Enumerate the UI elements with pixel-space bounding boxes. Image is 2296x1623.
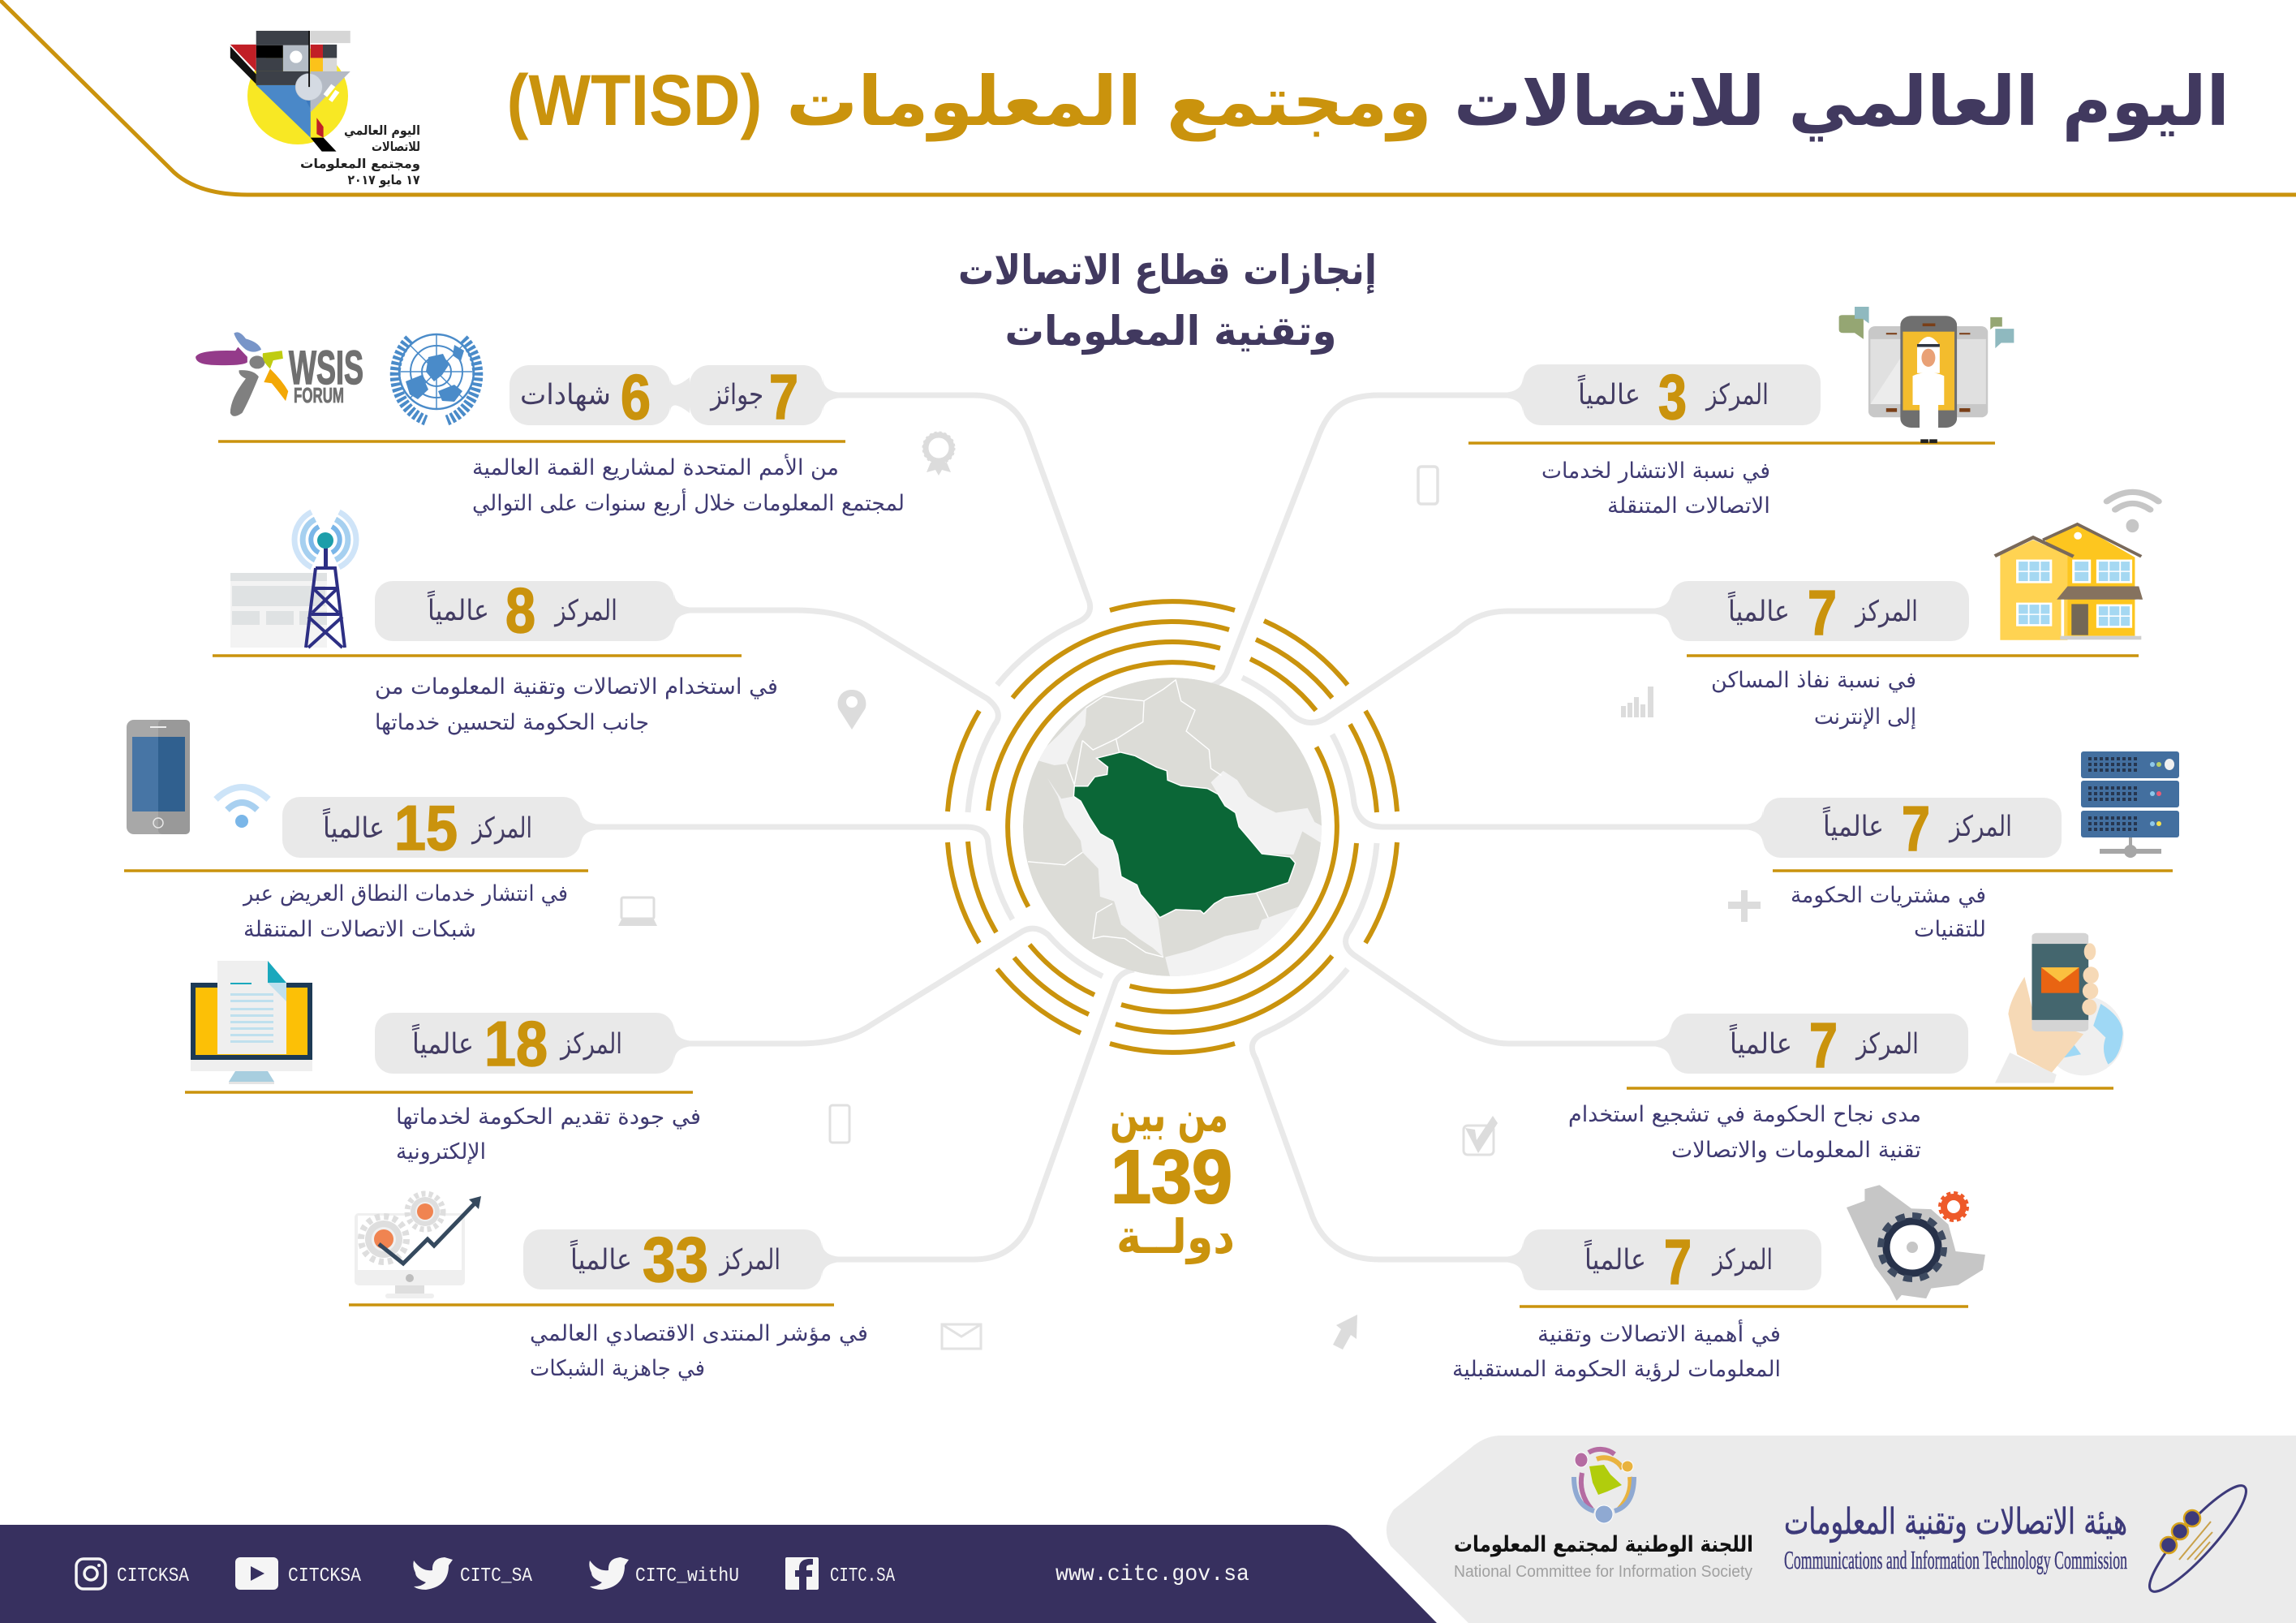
icon: WSIS Forum logo — [196, 332, 363, 416]
icon: WSIS Forum logo: WSIS — [289, 342, 363, 394]
title: ومجتمع المعلومات — [786, 62, 1432, 142]
event logo: ومجتمع المعلومات — [300, 156, 420, 171]
panel: rank 18 e-gov services — [185, 1008, 701, 1165]
footer logos panel — [1387, 1436, 2296, 1623]
panel: rank 3 mobile penetration: الاتصالات المتنقلة — [1607, 493, 1770, 519]
center label: 139 — [1111, 1134, 1232, 1219]
panel: rank 15 mobile broadband: المركز — [471, 812, 532, 845]
panel: rank 7 future vision: المعلومات لرؤية الحكومة المستقبلية — [1452, 1357, 1781, 1382]
icon: facebook — [785, 1557, 819, 1590]
icon: hand holding phone — [1995, 933, 2124, 1083]
panel: rank 7 household internet: 7 — [1808, 577, 1837, 648]
center label: من بين — [1110, 1087, 1228, 1143]
panel: rank 15 mobile broadband: في انتشار خدمات النطاق العريض عبر — [242, 881, 568, 906]
icon: arrow — [1333, 1315, 1357, 1350]
footer band — [0, 1525, 1437, 1623]
panel: rank 7 government success: 7 — [1809, 1010, 1838, 1081]
panel: rank 7 household internet — [1650, 577, 2139, 730]
panel: rank 8 government ICT use: المركز — [553, 595, 617, 627]
connectors — [581, 395, 1763, 1259]
panel: rank 7 household internet: في نسبة نفاذ المساكن — [1711, 668, 1916, 693]
panel: rank 18 e-gov services: الإلكترونية — [396, 1139, 486, 1165]
event logo: اليوم العالمي — [344, 123, 420, 139]
panel: rank 7 government procurement: للتقنيات — [1914, 917, 1986, 942]
icon: Saudi map with gears — [1847, 1185, 1985, 1301]
icon: twitter — [413, 1557, 453, 1590]
panel: rank 33 WEF network readiness: في جاهزية الشبكات — [530, 1356, 705, 1381]
panel: rank 7 government procurement: المركز — [1948, 811, 2012, 843]
icon: instagram — [76, 1559, 105, 1589]
Saudi Arabia — [1073, 752, 1296, 918]
icon: envelope — [942, 1324, 981, 1349]
subtitle: إنجازات قطاع الاتصالات — [958, 247, 1377, 295]
event logo: ١٧ مايو ٢٠١٧ — [347, 172, 420, 187]
icon: man on phones — [1839, 307, 2014, 443]
panel: awards and certificates: جوائز — [709, 379, 763, 411]
footer band: CITC_withU — [635, 1565, 739, 1587]
logo: national committee: National Committee for Information Society — [1454, 1563, 1752, 1581]
panel: rank 7 government procurement: في مشتريات الحكومة — [1791, 883, 1986, 908]
icon: mobile outline small — [830, 1105, 849, 1143]
footer band: CITCKSA — [117, 1565, 190, 1587]
panel: rank 8 government ICT use: عالمياً — [427, 590, 489, 627]
panel: rank 15 mobile broadband: شبكات الاتصالات المتنقلة — [243, 917, 476, 942]
footer band: www.citc.gov.sa — [1056, 1562, 1249, 1587]
panel: rank 7 future vision: في أهمية الاتصالات وتقنية — [1537, 1319, 1781, 1347]
panel: rank 3 mobile penetration: المركز — [1705, 379, 1769, 411]
panel: rank 8 government ICT use: في استخدام الاتصالات وتقنية المعلومات من — [375, 674, 778, 700]
panel: rank 7 household internet: إلى الإنترنت — [1814, 704, 1916, 730]
panel: rank 18 e-gov services: عالمياً — [411, 1023, 474, 1061]
panel: rank 3 mobile penetration: في نسبة الانتشار لخدمات — [1541, 458, 1770, 484]
gold rings — [948, 601, 1397, 1053]
panel: rank 8 government ICT use: 8 — [505, 575, 535, 646]
panel: rank 33 WEF network readiness: عالمياً — [570, 1239, 632, 1276]
footer band: CITC.SA — [830, 1565, 895, 1587]
panel: rank 7 government success — [1568, 1010, 2113, 1163]
panel: awards and certificates: شهادات — [520, 379, 611, 411]
icon: plus — [1728, 890, 1761, 922]
panel: rank 7 government success: تقنية المعلومات والاتصالات — [1671, 1138, 1921, 1163]
panel: rank 3 mobile penetration: 3 — [1658, 361, 1687, 433]
event logo — [230, 31, 420, 187]
panel: rank 3 mobile penetration — [1468, 361, 1995, 519]
title: اليوم العالمي للاتصالات — [1454, 62, 2229, 142]
wifi — [2107, 492, 2159, 510]
icon: house with wifi — [1995, 492, 2159, 640]
panel: rank 7 government procurement — [1743, 793, 2173, 942]
panel: awards and certificates — [218, 361, 905, 516]
panel: rank 7 household internet: المركز — [1854, 596, 1918, 628]
panel: awards and certificates: 6 — [621, 361, 651, 433]
panel: rank 3 mobile penetration: عالمياً — [1577, 374, 1640, 411]
logo: national committee: اللجنة الوطنية لمجتمع المعلومات — [1454, 1532, 1753, 1557]
logo: CITC — [1784, 1476, 2256, 1601]
icon: laptop — [618, 898, 657, 926]
panel: rank 33 WEF network readiness — [349, 1224, 868, 1381]
icon: map pin — [838, 690, 866, 730]
panel: rank 7 future vision: عالمياً — [1584, 1239, 1646, 1276]
icon: WSIS Forum logo: FORUM — [294, 383, 344, 407]
icon: youtube — [235, 1557, 278, 1590]
center label: دولــة — [1116, 1209, 1235, 1265]
panel: rank 7 government procurement: 7 — [1902, 793, 1930, 864]
logo: national committee — [1454, 1449, 1753, 1581]
subtitle: وتقنية المعلومات — [1004, 308, 1337, 355]
panel: rank 15 mobile broadband: 15 — [394, 792, 458, 863]
globe map — [1023, 678, 1323, 978]
event logo: للاتصالات — [372, 139, 420, 154]
icon: UN emblem — [395, 334, 478, 420]
title — [506, 59, 2229, 142]
panel: rank 18 e-gov services: 18 — [484, 1008, 548, 1079]
title: (WTISD) — [506, 59, 763, 140]
panel: rank 7 government success: المركز — [1855, 1028, 1919, 1061]
header rule — [0, 0, 2296, 195]
panel: awards and certificates: لمجتمع المعلومات خلال أربع سنوات على التوالي — [472, 488, 905, 516]
icon: blue wifi — [216, 787, 269, 828]
panel: rank 7 government success: عالمياً — [1729, 1023, 1792, 1061]
icon: medal — [923, 433, 954, 476]
panel: rank 8 government ICT use: جانب الحكومة لتحسين خدماتها — [375, 710, 649, 735]
icon: gears monitor with rising arrow — [355, 1194, 481, 1298]
icon: blue smartphone — [127, 720, 190, 834]
panel: rank 18 e-gov services: في جودة تقديم الحكومة لخدماتها — [396, 1104, 701, 1130]
panel: awards and certificates: 7 — [769, 361, 798, 433]
center label — [1110, 1087, 1235, 1265]
panel: rank 33 WEF network readiness: في مؤشر المنتدى الاقتصادي العالمي — [530, 1321, 868, 1346]
icon: twitter — [589, 1557, 629, 1590]
panel: rank 18 e-gov services: المركز — [559, 1028, 622, 1061]
subtitle — [958, 247, 1377, 355]
footer band: CITCKSA — [288, 1565, 362, 1587]
logo: CITC: هيئة الاتصالات وتقنية المعلومات — [1784, 1501, 2127, 1543]
panel: awards and certificates: من الأمم المتحدة لمشاريع القمة العالمية — [472, 453, 839, 480]
panel: rank 7 household internet: عالمياً — [1727, 591, 1790, 628]
panel: rank 15 mobile broadband — [124, 792, 601, 942]
panel: rank 7 future vision — [1452, 1226, 1968, 1382]
footer band: CITC_SA — [460, 1565, 533, 1587]
icon: bars chart — [1621, 687, 1653, 717]
panel: rank 7 future vision: المركز — [1711, 1244, 1773, 1276]
panel: rank 15 mobile broadband: عالمياً — [322, 807, 385, 845]
icon: server rack — [2081, 751, 2179, 858]
panel: rank 7 government procurement: عالمياً — [1822, 806, 1884, 843]
panel: rank 8 government ICT use — [213, 575, 778, 735]
panel: rank 7 government success: مدى نجاح الحكومة في تشجيع استخدام — [1568, 1102, 1921, 1127]
icon: mobile outline — [1418, 467, 1438, 504]
icon: tower and browser — [230, 512, 356, 648]
panel: rank 33 WEF network readiness: 33 — [643, 1224, 708, 1295]
panel: rank 33 WEF network readiness: المركز — [718, 1244, 780, 1276]
icon: checkbox — [1464, 1116, 1498, 1155]
icon: monitor and document — [191, 961, 312, 1084]
panel: rank 7 future vision: 7 — [1664, 1226, 1692, 1298]
